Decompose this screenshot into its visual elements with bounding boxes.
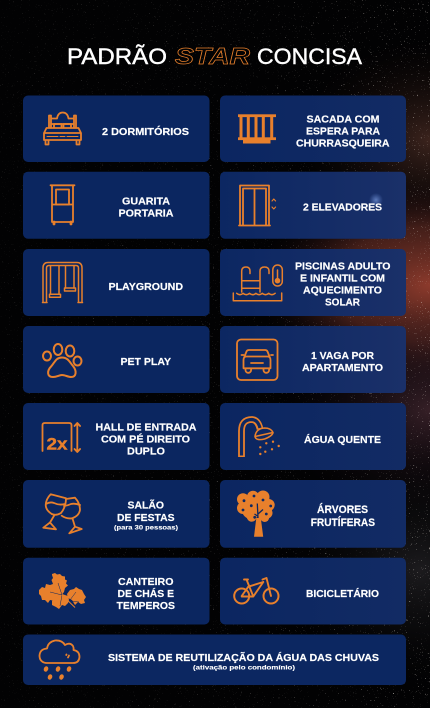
label: [114, 499, 178, 531]
panel: 2 dormitórios: [23, 96, 210, 162]
panel: hall: [23, 403, 210, 470]
label: [116, 577, 175, 612]
icon: elevator: [239, 186, 276, 226]
label: [108, 651, 379, 671]
label: FRUTÍFERAS: [311, 516, 375, 529]
label: CANTEIRO: [118, 577, 174, 588]
icon: balustrade: [238, 114, 276, 144]
panel: árvores frutíferas: [220, 480, 406, 548]
label: BICICLETÁRIO: [306, 587, 379, 600]
label: SOLAR: [325, 298, 361, 309]
label: PORTARIA: [118, 209, 174, 220]
icon: swing: [42, 262, 82, 302]
title: [67, 43, 362, 69]
label: [302, 351, 383, 374]
label: [296, 114, 390, 149]
label: DE FESTAS: [117, 513, 175, 524]
panel: piscinas: [220, 249, 406, 316]
icon: guard booth: [50, 185, 74, 224]
label: [295, 262, 391, 309]
label: E INFANTIL COM: [300, 274, 385, 285]
icon: paw: [43, 344, 82, 377]
title: CONCISA: [257, 44, 362, 69]
icon: shower: [242, 420, 279, 457]
panel: sacada: [220, 96, 406, 162]
label: ÁRVORES: [317, 503, 368, 516]
icon: pool with thermometer: [233, 265, 282, 301]
label: HALL DE ENTRADA: [96, 422, 197, 433]
label: SALÃO: [128, 499, 164, 512]
icon: wine glasses: [43, 494, 82, 533]
panel: canteiro: [23, 558, 210, 624]
label: [96, 422, 197, 457]
icon: rain cloud: [40, 640, 80, 680]
label: [311, 503, 375, 529]
panel: salão de festas: [23, 480, 210, 548]
label: ESPERA PARA: [306, 126, 381, 137]
panel: guarita: [23, 172, 210, 239]
label: GUARITA: [122, 197, 171, 208]
label: DE CHÁS E: [118, 587, 174, 600]
icon: herb leaves: [39, 573, 86, 609]
label: PISCINAS ADULTO: [295, 262, 391, 273]
panel: sistema de reutilização: [23, 634, 406, 685]
icon: fruit tree: [237, 490, 275, 537]
label: SISTEMA DE REUTILIZAÇÃO DA ÁGUA DAS CHUVAS: [108, 651, 379, 664]
label: 2 ELEVADORES: [303, 203, 382, 214]
label: 1 VAGA POR: [311, 351, 375, 362]
label: [118, 197, 174, 220]
panel: bicicletário: [220, 558, 406, 624]
label: APARTAMENTO: [302, 363, 383, 374]
label: PET PLAY: [120, 357, 171, 368]
icon: car in rounded square: [237, 340, 278, 380]
panel: água quente: [220, 403, 406, 470]
icon: bed: [44, 112, 81, 144]
title: PADRÃO: [67, 44, 167, 69]
label: DUPLO: [127, 446, 165, 457]
label: CHURRASQUEIRA: [296, 138, 390, 149]
title: STAR: [175, 43, 250, 69]
label: SACADA COM: [306, 114, 380, 125]
label: AQUECIMENTO: [303, 286, 382, 297]
icon: double height: [42, 423, 80, 454]
label: COM PÉ DIREITO: [101, 432, 190, 445]
label: PLAYGROUND: [108, 282, 183, 293]
label: (para 30 pessoas): [114, 525, 178, 531]
label: ÁGUA QUENTE: [304, 433, 381, 446]
label: 2 DORMITÓRIOS: [102, 125, 189, 138]
icon: bicycle: [234, 578, 278, 604]
panel: vaga: [220, 326, 406, 393]
panel: pet play: [23, 326, 210, 393]
panel: playground: [23, 249, 210, 316]
glow: [369, 193, 383, 207]
icon: double height: 2x: [46, 434, 68, 454]
label: (ativação pelo condomínio): [193, 665, 295, 671]
panel: elevadores: [220, 172, 406, 239]
label: TEMPEROS: [116, 601, 175, 612]
